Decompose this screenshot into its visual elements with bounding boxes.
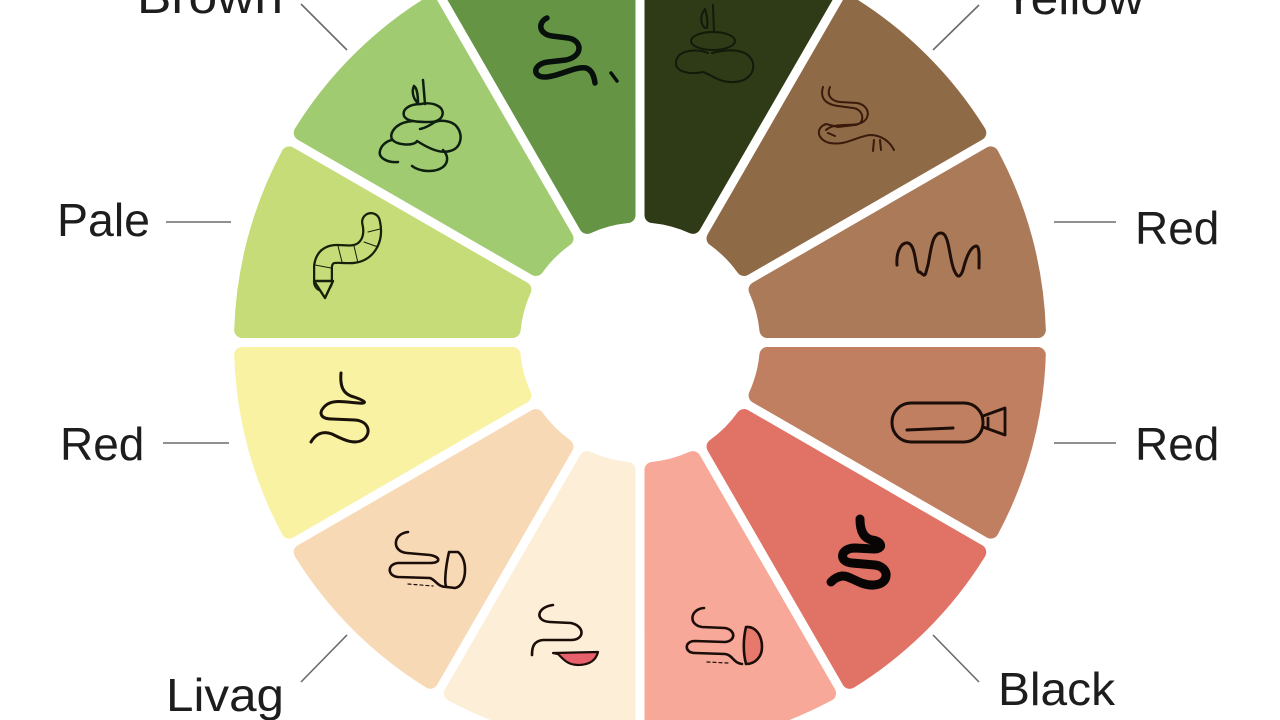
label: Black: [933, 635, 1116, 715]
icon: coiled stool: [380, 80, 461, 171]
icon: peach worm and sac: [390, 532, 465, 588]
segment: dark olive: [652, 0, 828, 226]
segment: cream: [452, 459, 628, 720]
label: Red left: Red: [60, 418, 144, 470]
label: Livag: [166, 635, 347, 720]
icon: worm and red bowl: [532, 605, 598, 665]
label: Black: Black: [998, 663, 1116, 715]
icon: sausage: [892, 403, 1005, 442]
icon: dark stool: [676, 5, 753, 82]
segment: brown: [709, 4, 1002, 336]
label: Livag: Livag: [166, 669, 284, 720]
icon: thin worm: [311, 373, 368, 442]
segment: lime: [242, 154, 523, 330]
segment: mid green: [452, 0, 745, 235]
icon: brown worm: [819, 87, 894, 151]
wheel: [201, 0, 1079, 720]
label: Brown: [137, 0, 347, 50]
label: Red upper right: Red: [1135, 202, 1219, 254]
icon: salmon worm and sac: [687, 608, 762, 664]
label: Red lower right: Red: [1135, 418, 1219, 470]
segment: tan: [747, 154, 1079, 447]
segment: light green: [302, 0, 633, 273]
segment: peach: [278, 349, 571, 681]
segment: salmon: [535, 450, 828, 720]
segment: coral red: [647, 412, 978, 704]
segment: terracotta: [757, 355, 1038, 531]
icon: thick black worm: [831, 519, 886, 585]
label: Yellow: [933, 0, 1145, 50]
label: Pale: Pale: [57, 194, 150, 246]
icon: wave worm: [897, 233, 979, 276]
icon: segmented larva: [314, 222, 380, 298]
icon: black worm with dot: [536, 18, 617, 83]
segment: pale yellow: [201, 238, 533, 531]
